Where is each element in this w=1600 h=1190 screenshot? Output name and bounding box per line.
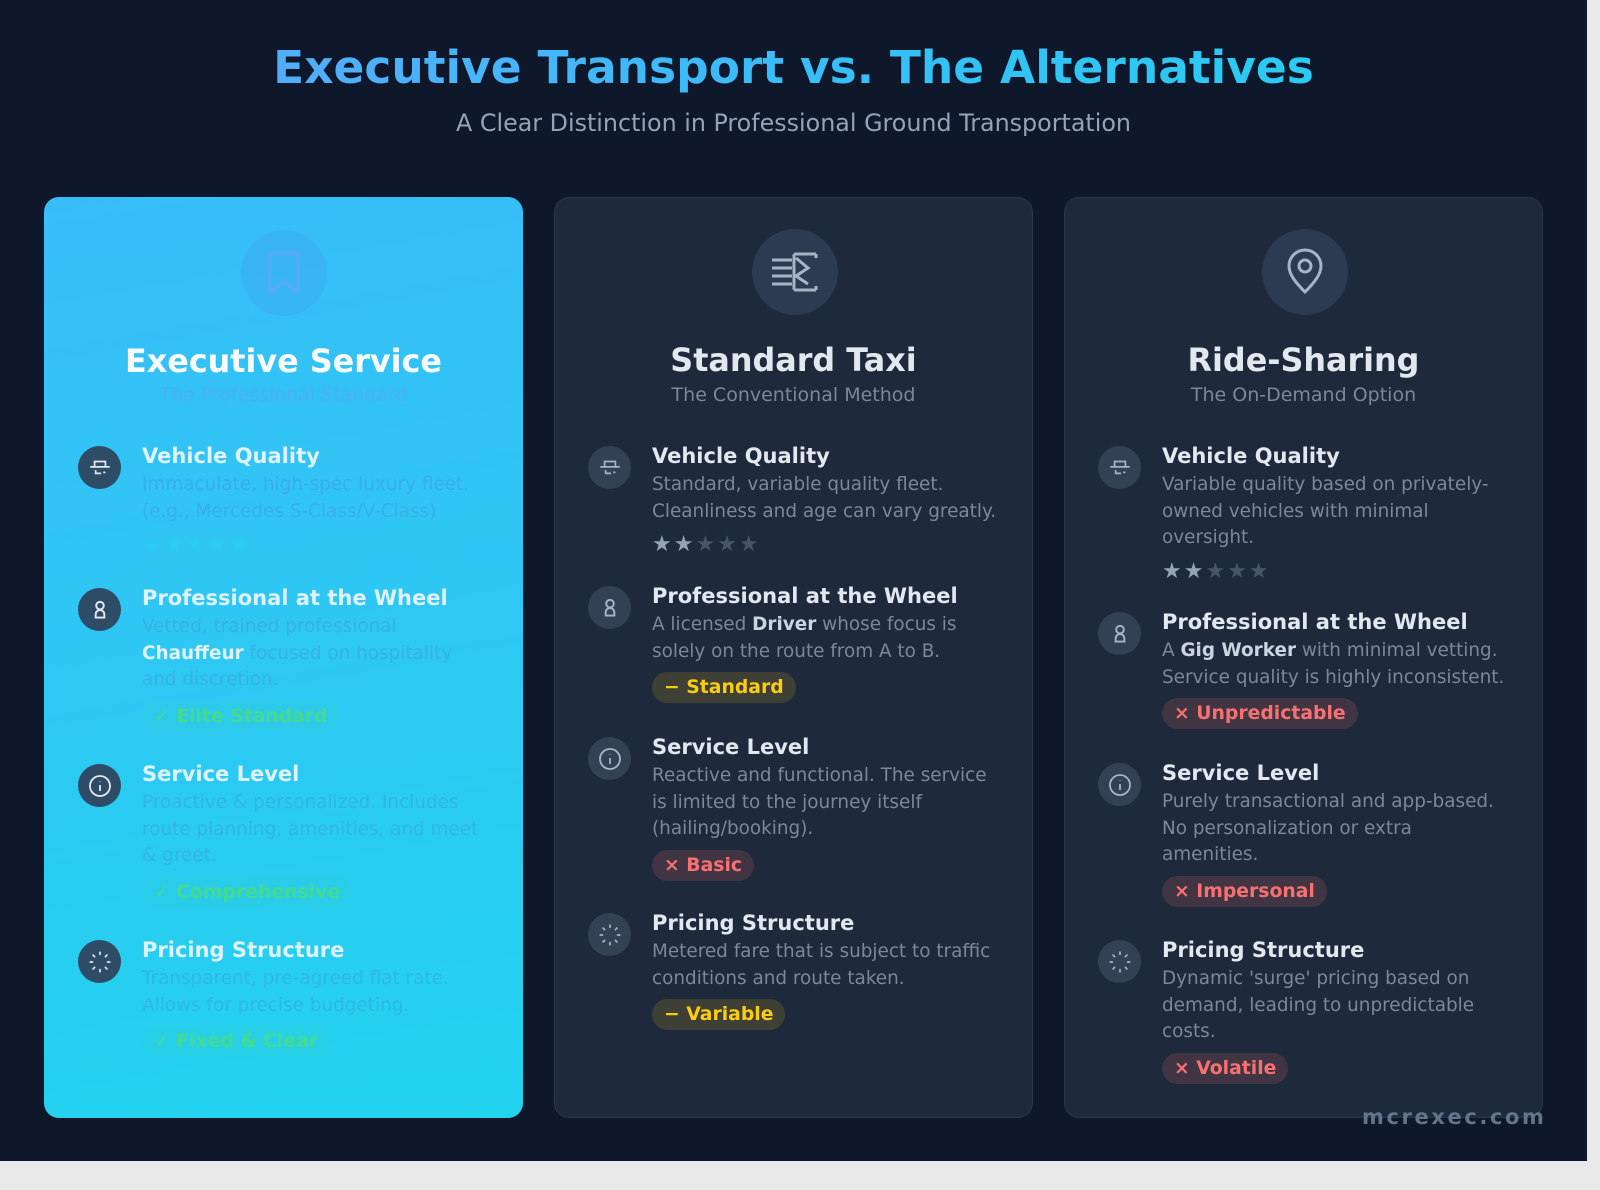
item: professional: × Unpredictable bbox=[1174, 703, 1346, 724]
panel: standard taxi bbox=[554, 197, 1033, 1118]
title: Executive Transport vs. The Alternatives bbox=[273, 41, 1314, 94]
item: professional bbox=[78, 586, 452, 726]
item: pricing: Transparent, pre-agreed flat rate. Allows for precise budgeting. bbox=[142, 968, 449, 1016]
item: professional: Professional at the Wheel bbox=[1162, 610, 1468, 634]
item: vehicle quality: Vehicle Quality bbox=[142, 444, 320, 468]
item: pricing: Dynamic 'surge' pricing based on demand, leading to unpredictable costs. bbox=[1162, 968, 1474, 1042]
item: vehicle quality: Standard, variable quality fleet. Cleanliness and age can vary greatly. bbox=[652, 474, 996, 522]
item: professional: ✓ Elite Standard bbox=[154, 706, 328, 726]
item: service level: Proactive & personalized. Includes route planning, amenities, and meet & greet. bbox=[142, 792, 478, 866]
item: service level bbox=[1098, 761, 1494, 907]
item: vehicle quality: ★★★★★ bbox=[1162, 558, 1271, 584]
title bbox=[0, 38, 1587, 98]
item: professional: Professional at the Wheel bbox=[142, 586, 448, 610]
item: vehicle quality: Immaculate, high-spec luxury fleet. (e.g., Mercedes S-Class/V-Class) bbox=[142, 474, 469, 522]
tagline: The Conventional Method bbox=[672, 384, 915, 406]
item: vehicle quality bbox=[78, 444, 469, 557]
item: professional: Vetted, trained professional Chauffeur focused on hospitality and discretion. bbox=[142, 616, 452, 690]
item: service level bbox=[78, 762, 478, 902]
item: service level: Purely transactional and app-based. No personalization or extra amenities. bbox=[1162, 791, 1494, 865]
item: service level: × Basic bbox=[664, 854, 742, 876]
item: vehicle quality: ★★★★★ bbox=[652, 532, 761, 557]
panel: executive service bbox=[44, 197, 523, 1118]
item: vehicle quality: ★★★★★ bbox=[142, 532, 251, 557]
item: vehicle quality: Vehicle Quality bbox=[1162, 444, 1340, 468]
heading: ride-sharing: Ride-Sharing bbox=[1188, 342, 1419, 379]
item: professional bbox=[1098, 610, 1504, 729]
item: pricing bbox=[588, 911, 990, 1030]
icon: map pin bbox=[1262, 229, 1348, 315]
item: vehicle quality: Vehicle Quality bbox=[652, 444, 830, 468]
watermark: mcrexec.com bbox=[1362, 1105, 1547, 1129]
heading: executive service: Executive Service bbox=[125, 343, 442, 380]
heading: standard taxi: Standard Taxi bbox=[670, 342, 917, 379]
item: professional: A Gig Worker with minimal vetting. Service quality is highly inconsistent. bbox=[1162, 640, 1504, 688]
item: service level: Service Level bbox=[142, 762, 299, 786]
item: pricing bbox=[1098, 938, 1474, 1084]
item: professional: − Standard bbox=[664, 677, 784, 698]
item: service level: Service Level bbox=[1162, 761, 1319, 785]
item: pricing: Pricing Structure bbox=[142, 938, 344, 962]
item: vehicle quality bbox=[1098, 444, 1489, 584]
item: professional bbox=[588, 584, 958, 703]
item: vehicle quality: Variable quality based on privately-owned vehicles with minimal oversight. bbox=[1162, 474, 1489, 548]
item: pricing: Pricing Structure bbox=[1162, 938, 1364, 962]
tagline: The On-Demand Option bbox=[1191, 384, 1416, 406]
item: service level: Service Level bbox=[652, 735, 809, 759]
item: service level: × Impersonal bbox=[1174, 880, 1315, 902]
item: pricing: Metered fare that is subject to traffic conditions and route taken. bbox=[652, 941, 990, 988]
item: service level: ✓ Comprehensive bbox=[154, 882, 340, 902]
item: vehicle quality bbox=[588, 444, 996, 557]
item: service level bbox=[588, 735, 987, 881]
item: professional: Professional at the Wheel bbox=[652, 584, 958, 608]
panel: ride-sharing bbox=[1064, 197, 1543, 1118]
subtitle: A Clear Distinction in Professional Ground Transportation bbox=[456, 109, 1131, 137]
item: pricing: Pricing Structure bbox=[652, 911, 854, 935]
item: professional: A licensed Driver whose focus is solely on the route from A to B. bbox=[652, 614, 956, 662]
item: pricing: ✓ Fixed & Clear bbox=[154, 1031, 318, 1052]
icon: taxi meter bbox=[752, 229, 838, 315]
item: pricing bbox=[78, 938, 449, 1052]
item: pricing: × Volatile bbox=[1174, 1058, 1276, 1078]
icon: bookmark bbox=[241, 230, 327, 316]
item: pricing: − Variable bbox=[664, 1004, 773, 1025]
tagline: The Professional Standard bbox=[159, 384, 408, 406]
item: service level: Reactive and functional. The service is limited to the journey itself (hailing/booking). bbox=[652, 765, 987, 839]
